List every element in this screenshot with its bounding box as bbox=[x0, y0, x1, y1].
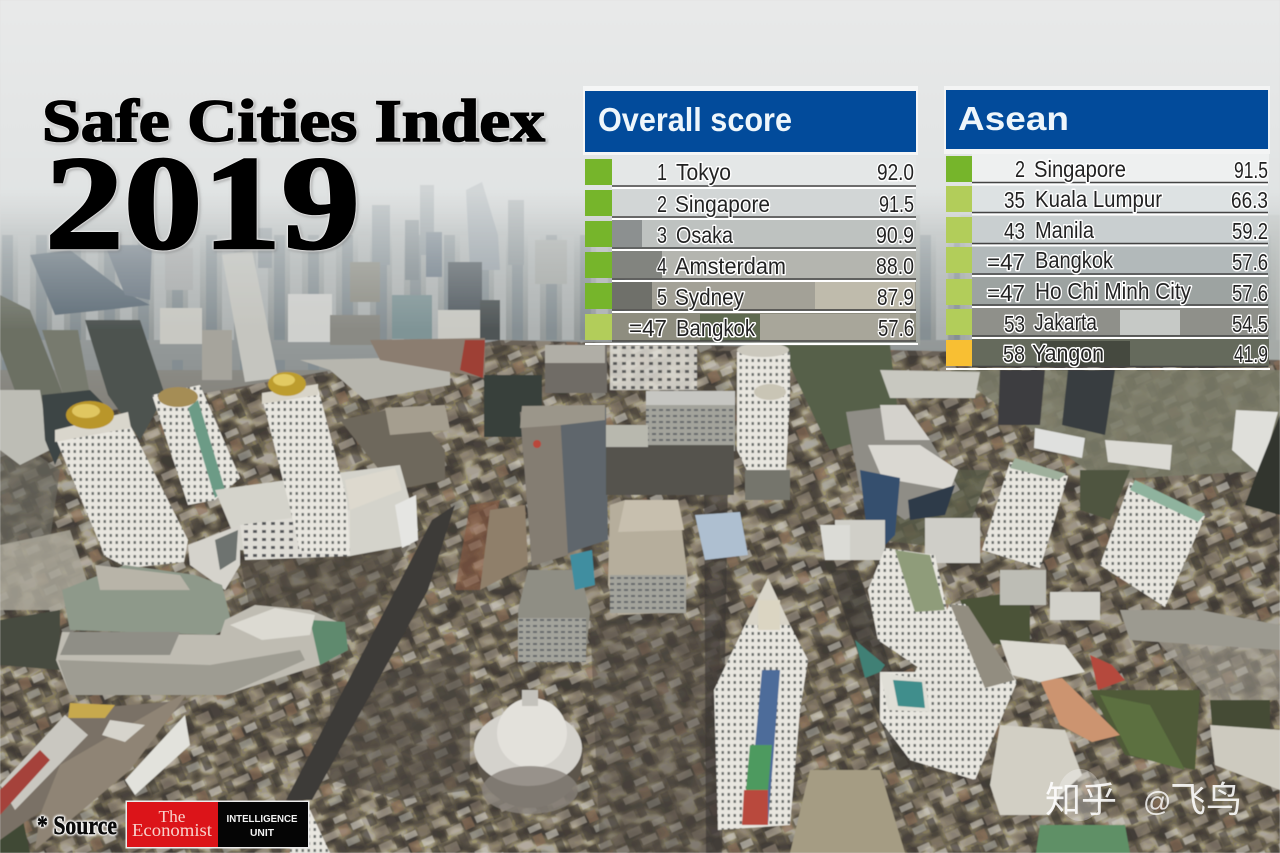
row: Bangkok bbox=[946, 247, 1268, 276]
row: Yangon: 58 bbox=[1003, 341, 1025, 367]
row: Sydney bbox=[585, 283, 916, 312]
building: Sheraton-style grey tower bbox=[520, 405, 608, 566]
row: Tokyo: 1 bbox=[657, 159, 667, 185]
row: Sydney: 5 bbox=[657, 284, 667, 310]
row: Yangon: 41.9 bbox=[1234, 341, 1268, 367]
panel background rows bbox=[583, 86, 918, 341]
watermark: 飞鸟 bbox=[1170, 779, 1242, 820]
row: Singapore: 91.5 bbox=[879, 191, 914, 217]
row: Bangkok: =47 bbox=[987, 249, 1025, 275]
row: Jakarta: Jakarta bbox=[1034, 309, 1098, 335]
building: domed shopping mall bbox=[474, 690, 583, 814]
row: Singapore bbox=[946, 156, 1268, 184]
row: Manila: 43 bbox=[1004, 218, 1025, 244]
building: rainbow-striped tower bbox=[714, 578, 808, 830]
logo: The Economist Intelligence Unit: UNIT bbox=[250, 827, 275, 839]
row: Amsterdam bbox=[585, 252, 916, 281]
logo: The Economist Intelligence Unit: The bbox=[158, 807, 186, 826]
building: white tower at bottom beside logo bbox=[290, 810, 330, 853]
building: far right mall bbox=[835, 405, 960, 560]
heading: Overall score bbox=[585, 91, 916, 152]
row: Tokyo bbox=[585, 159, 916, 188]
building: green-striped tower bbox=[152, 385, 240, 505]
title line: Safe Cities Index: Safe Cities Index bbox=[42, 88, 545, 154]
ground: dense low-rise district bbox=[0, 340, 1280, 853]
row: Ho Chi Minh City: =47 bbox=[987, 280, 1025, 306]
row: Osaka: 3 bbox=[657, 222, 667, 248]
row: Bangkok: 57.6 bbox=[878, 315, 914, 341]
row: Manila bbox=[946, 217, 1268, 246]
building: stepped hotels bbox=[868, 518, 1017, 780]
building: gold-domed tower left bbox=[55, 401, 188, 568]
building: mid-rise group behind towers bbox=[0, 320, 697, 490]
row: Ho Chi Minh City: 57.6 bbox=[1232, 280, 1268, 306]
distant skyline bbox=[0, 182, 1280, 410]
row: Ho Chi Minh City bbox=[946, 278, 1268, 307]
heading: Asean bbox=[946, 90, 1268, 149]
row: Singapore: 2 bbox=[1015, 156, 1025, 182]
row: Kuala Lumpur: Kuala Lumpur bbox=[1035, 186, 1162, 212]
row: Jakarta: 53 bbox=[1004, 311, 1025, 337]
row: Sydney: Sydney bbox=[675, 284, 744, 310]
main road bbox=[286, 505, 455, 800]
row: Amsterdam: 4 bbox=[657, 253, 667, 279]
building: distant dark towers right bbox=[880, 370, 1280, 515]
row: Osaka bbox=[585, 221, 916, 250]
row: Kuala Lumpur: 35 bbox=[1004, 187, 1025, 213]
row: Manila: 59.2 bbox=[1232, 218, 1268, 244]
row: Manila: Manila bbox=[1035, 217, 1095, 243]
row: Tokyo: 92.0 bbox=[877, 159, 914, 185]
watermark: @ bbox=[1143, 786, 1171, 817]
row: Tokyo: Tokyo bbox=[676, 159, 731, 185]
heading: Asean: Asean bbox=[958, 100, 1069, 137]
row: Jakarta bbox=[946, 309, 1268, 338]
row: Bangkok: Bangkok bbox=[676, 315, 755, 341]
row: Sydney: 87.9 bbox=[877, 284, 914, 310]
row: Singapore: Singapore bbox=[675, 191, 770, 217]
building: parking block bbox=[518, 550, 595, 662]
row: Yangon: Yangon bbox=[1032, 340, 1104, 366]
logo: The Economist Intelligence Unit: INTELLIGENCE bbox=[226, 813, 298, 825]
row: Bangkok bbox=[585, 314, 918, 344]
row: Singapore: Singapore bbox=[1034, 156, 1126, 182]
logo: The Economist Intelligence Unit bbox=[126, 800, 310, 848]
building: white slab tower bbox=[982, 458, 1068, 568]
row: Amsterdam: 88.0 bbox=[876, 253, 914, 279]
row: Kuala Lumpur bbox=[946, 186, 1268, 214]
row: Osaka: 90.9 bbox=[876, 222, 914, 248]
row: Singapore: 2 bbox=[657, 191, 667, 217]
heading: Overall score: Overall score bbox=[598, 101, 792, 138]
row: Ho Chi Minh City: Ho Chi Minh City bbox=[1035, 278, 1191, 304]
row: Jakarta: 54.5 bbox=[1232, 311, 1268, 337]
title: Safe Cities Index 2019 bbox=[42, 88, 549, 270]
source label: * Source bbox=[37, 811, 117, 840]
row: Osaka: Osaka bbox=[676, 222, 734, 248]
building: green mid-rise and mall bbox=[56, 565, 348, 695]
panel background rows bbox=[944, 86, 1270, 367]
left plaza and bus depot bbox=[0, 690, 190, 850]
logo: The Economist Intelligence Unit: Economist bbox=[132, 820, 212, 840]
row: Bangkok: 57.6 bbox=[1232, 249, 1268, 275]
row: Kuala Lumpur: 66.3 bbox=[1231, 187, 1268, 213]
source note with Economist Intelligence Unit logo bbox=[35, 800, 310, 848]
row: Bangkok: Bangkok bbox=[1035, 247, 1113, 273]
building: white slab tower with green roof bbox=[1100, 480, 1205, 607]
row: Yangon bbox=[946, 340, 1270, 369]
row: Singapore bbox=[585, 190, 916, 219]
row: Bangkok: =47 bbox=[629, 315, 667, 341]
row: Amsterdam: Amsterdam bbox=[675, 253, 786, 279]
watermark: 知乎 bbox=[1045, 779, 1117, 820]
top haze bbox=[0, 0, 1280, 330]
building: centre-right department stores bbox=[606, 343, 790, 615]
rooftops lower right bbox=[790, 525, 1280, 853]
building: gold-domed tower right with podium bbox=[188, 372, 418, 590]
row: Singapore: 91.5 bbox=[1234, 157, 1268, 183]
